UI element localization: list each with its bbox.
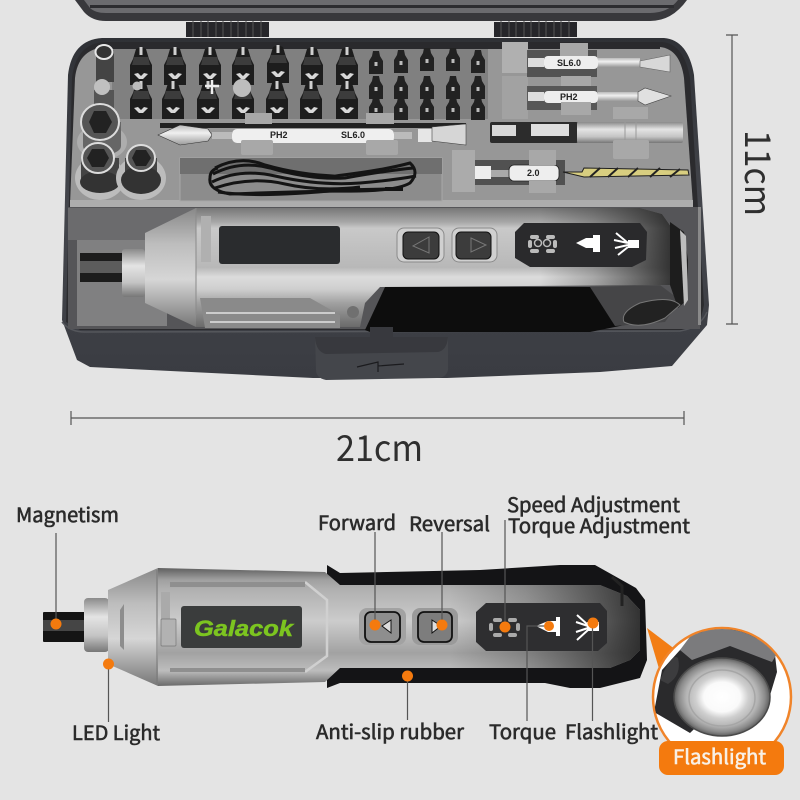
double-ended bit PH2 / SL6.0 [158, 113, 466, 155]
upper screwdriver [80, 208, 688, 332]
label: Reversal: Reversal [409, 508, 490, 537]
label: Forward: Forward [318, 507, 396, 536]
dimension: height 11cm: 11cm [734, 130, 786, 216]
leader lines [56, 520, 592, 722]
upper tray [70, 42, 693, 207]
dimension: width 21cm [71, 411, 684, 472]
hex socket bit and round bit [94, 45, 251, 119]
label: Torque: Torque [489, 716, 556, 745]
lower display with brand [181, 606, 302, 648]
callout: flashlight circle [652, 626, 792, 742]
drill bit 2.0: 2.0 [527, 168, 540, 178]
hinge right [494, 21, 577, 37]
callout: flashlight pill [659, 741, 784, 775]
dimension: width 21cm: 21cm [336, 420, 423, 472]
drill bit 2.0 [452, 150, 689, 193]
callout: flashlight pointer [647, 628, 676, 672]
label: Magnetism: Magnetism [16, 499, 119, 528]
upper button right [452, 228, 497, 262]
lower compartment [68, 207, 701, 329]
bit PH2 with block [527, 86, 671, 119]
case lid [75, 0, 687, 21]
callout: flashlight pill: Flashlight [673, 741, 766, 770]
upper display [219, 226, 340, 264]
magnetic bit holder [490, 122, 683, 159]
lower display with brand: Galacok [194, 616, 295, 641]
bit PH2 with block: PH2 [560, 92, 578, 102]
upper button left [397, 228, 444, 262]
hinge left [186, 21, 269, 37]
label: LED Light: LED Light [72, 717, 160, 746]
USB cable [210, 161, 416, 195]
double-ended bit PH2 / SL6.0: PH2 [270, 130, 288, 140]
sockets [75, 104, 166, 200]
case body [62, 38, 709, 378]
bit set: small bits [369, 48, 485, 120]
bit SL6.0 with block [502, 42, 670, 119]
dimension: height 11cm [726, 35, 786, 324]
label: Speed Adjustment: Speed Adjustment [507, 489, 680, 518]
bit slots grey panel [112, 49, 488, 119]
label: Anti-slip rubber: Anti-slip rubber [316, 716, 464, 745]
lower button forward [359, 608, 406, 645]
label: Torque Adjustment: Torque Adjustment [508, 510, 690, 539]
latch [315, 327, 448, 380]
lower button reversal [412, 608, 458, 645]
hotspot dots [50, 618, 598, 682]
double-ended bit PH2 / SL6.0: SL6.0 [341, 130, 365, 140]
upper control panel [515, 223, 647, 267]
bit set: large bits [130, 45, 358, 119]
label: Flashlight: Flashlight [565, 716, 658, 745]
cable compartment [180, 158, 442, 201]
lower screwdriver [43, 565, 647, 688]
bit SL6.0 with block: SL6.0 [557, 58, 581, 68]
lower control panel [476, 603, 607, 651]
